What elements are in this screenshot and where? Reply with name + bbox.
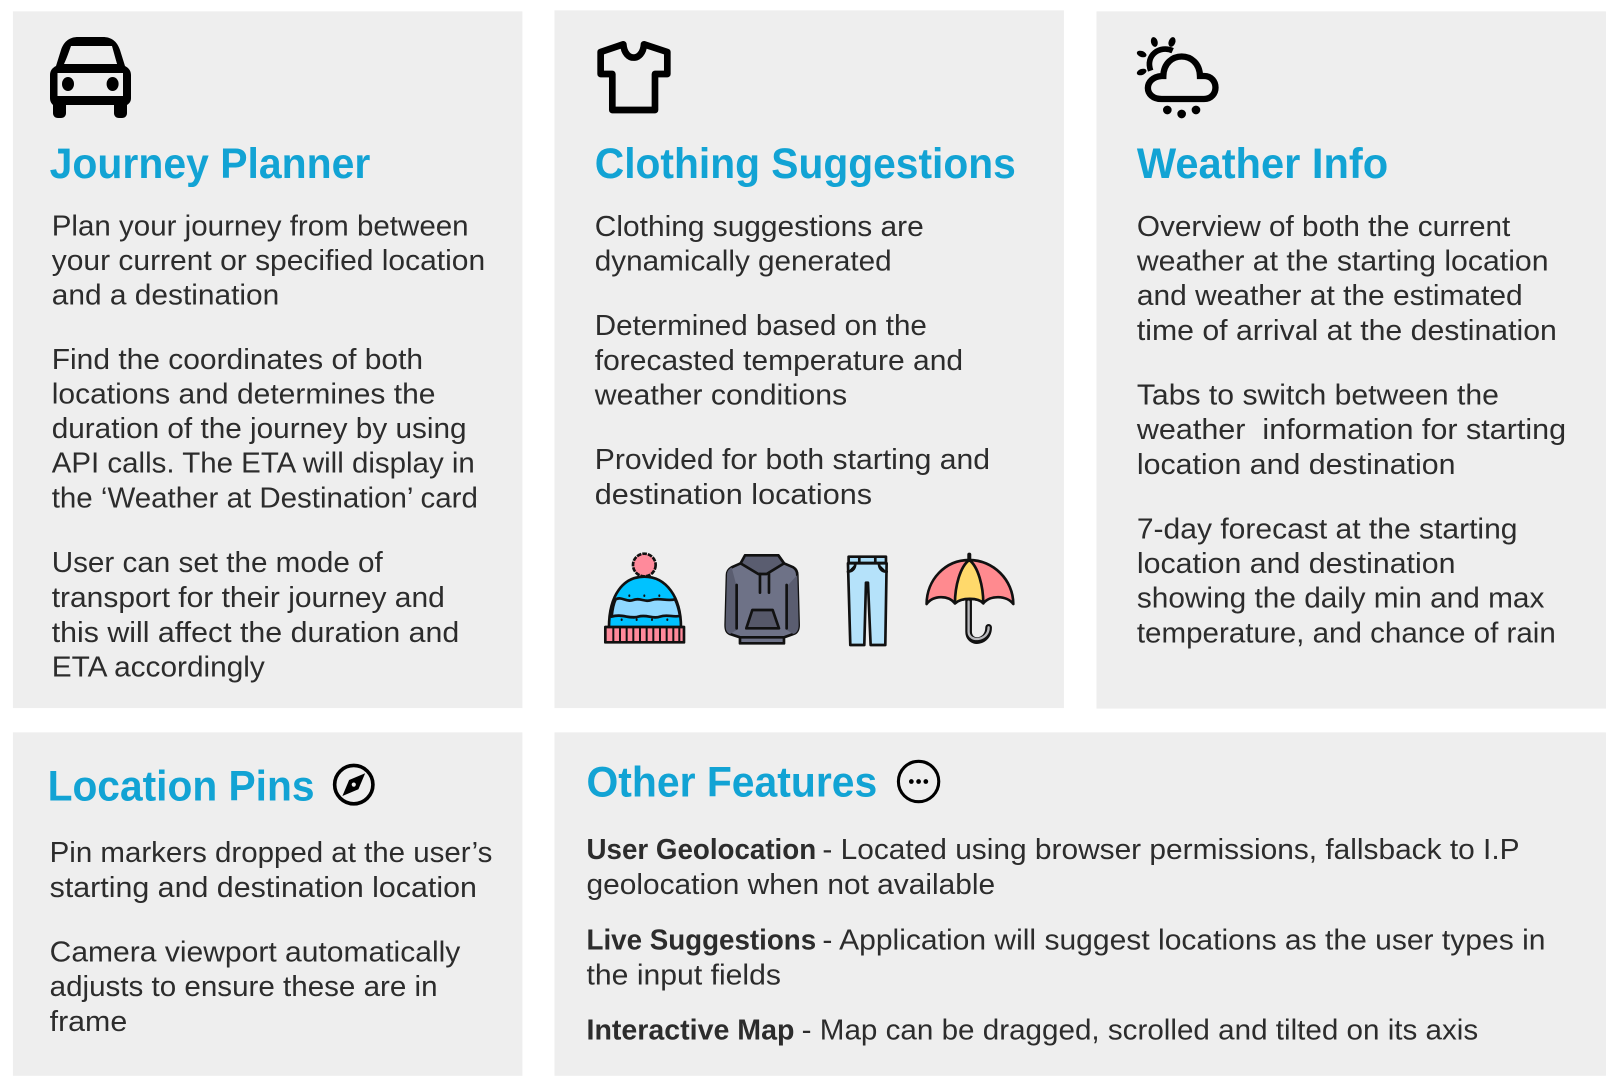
text: journey transport mode: User can set the mode of	[52, 547, 383, 579]
text: user geolocation: - Located using browser permissions, fallsback to I.P	[822, 834, 1520, 866]
panel: Weather Info	[1097, 11, 1606, 709]
text: journey coordinates: locations and determines the	[52, 378, 435, 410]
panel: Journey Planner	[13, 11, 522, 708]
text: weather forecast: temperature, and chance of rain	[1137, 617, 1556, 649]
text: clothing locations: Provided for both starting and	[595, 444, 990, 476]
icon: more options	[898, 761, 939, 802]
heading: Location Pins: Location Pins	[48, 763, 314, 811]
text: weather overview: and weather at the estimated	[1137, 280, 1523, 312]
icon: jeans	[848, 557, 887, 645]
text: journey transport mode: transport for their journey and	[52, 582, 445, 614]
text: clothing basis: forecasted temperature and	[595, 345, 963, 377]
text: user geolocation: User Geolocation	[587, 834, 816, 866]
text: pin markers: Pin markers dropped at the user’s	[50, 837, 492, 869]
text: pin markers: starting and destination location	[50, 872, 477, 904]
heading: Journey Planner: Journey Planner	[50, 140, 371, 188]
text: journey transport mode: this will affect the duration and	[52, 617, 459, 649]
text: journey coordinates: the ‘Weather at Destination’ card	[52, 482, 478, 514]
text: weather overview: weather at the starting location	[1136, 246, 1549, 278]
text: interactive map: - Map can be dragged, scrolled and tilted on its axis	[802, 1015, 1478, 1047]
icon: beanie hat	[605, 554, 684, 642]
text: clothing intro: Clothing suggestions are	[595, 211, 924, 243]
text: journey intro: Plan your journey from between	[52, 210, 469, 242]
text: clothing locations	[595, 444, 990, 511]
icon: weather cloud and sun	[1136, 36, 1215, 118]
text: journey intro	[52, 210, 485, 312]
text: clothing locations: destination locations	[595, 479, 872, 511]
text: weather tabs	[1136, 379, 1566, 481]
text: clothing intro	[595, 211, 924, 278]
text: weather overview	[1136, 211, 1557, 347]
text: weather tabs: location and destination	[1137, 449, 1455, 481]
text: weather tabs: Tabs to switch between the	[1137, 379, 1499, 411]
text: camera viewport: frame	[50, 1006, 127, 1038]
panel: Other Features	[554, 732, 1606, 1076]
text: camera viewport: adjusts to ensure these are in	[50, 971, 438, 1003]
panel: Location Pins	[13, 732, 522, 1076]
text: journey coordinates	[52, 344, 478, 514]
text: journey transport mode: ETA accordingly	[52, 652, 266, 684]
text: journey coordinates: duration of the journey by using	[52, 413, 467, 445]
text: pin markers	[50, 837, 492, 904]
text: journey coordinates: Find the coordinates of both	[52, 344, 423, 376]
icon: hoodie	[726, 555, 799, 643]
text: weather forecast: 7-day forecast at the starting	[1137, 513, 1518, 545]
panel: Clothing Suggestions	[554, 10, 1064, 708]
text: live suggestions: Live Suggestions	[587, 925, 816, 957]
text: live suggestions: the input fields	[587, 959, 781, 991]
text: weather overview: Overview of both the current	[1137, 211, 1510, 243]
text: user geolocation: geolocation when not available	[587, 869, 995, 901]
icons: clothing items	[605, 554, 1013, 645]
text: weather forecast: showing the daily min and max	[1137, 583, 1544, 615]
text: clothing intro: dynamically generated	[595, 246, 892, 278]
text: camera viewport: Camera viewport automatically	[50, 937, 461, 969]
icon: car	[50, 37, 131, 118]
text: clothing basis: weather conditions	[594, 379, 847, 411]
text: journey transport mode	[52, 547, 459, 684]
text: user geolocation	[587, 834, 1520, 901]
icon: t-shirt	[601, 44, 667, 110]
heading: Clothing Suggestions: Clothing Suggestions	[595, 140, 1016, 188]
icon: umbrella	[927, 555, 1013, 641]
text: live suggestions	[587, 925, 1545, 991]
text: weather forecast: location and destination	[1137, 548, 1455, 580]
text: journey coordinates: API calls. The ETA will display in	[52, 448, 475, 480]
text: camera viewport	[50, 937, 461, 1038]
text: journey intro: your current or specified location	[52, 245, 485, 277]
text: weather overview: time of arrival at the destination	[1137, 315, 1557, 347]
heading: Weather Info: Weather Info	[1137, 140, 1388, 188]
text: weather forecast	[1137, 513, 1556, 649]
text: interactive map: Interactive Map	[587, 1015, 794, 1047]
heading: Other Features: Other Features	[587, 759, 877, 807]
text: clothing basis: Determined based on the	[595, 310, 927, 342]
text: journey intro: and a destination	[52, 280, 279, 312]
text: clothing basis	[594, 310, 963, 411]
text: live suggestions: - Application will suggest locations as the user types in	[822, 925, 1545, 957]
text: weather tabs: weather information for starting	[1136, 414, 1566, 446]
icon: compass	[335, 765, 373, 804]
